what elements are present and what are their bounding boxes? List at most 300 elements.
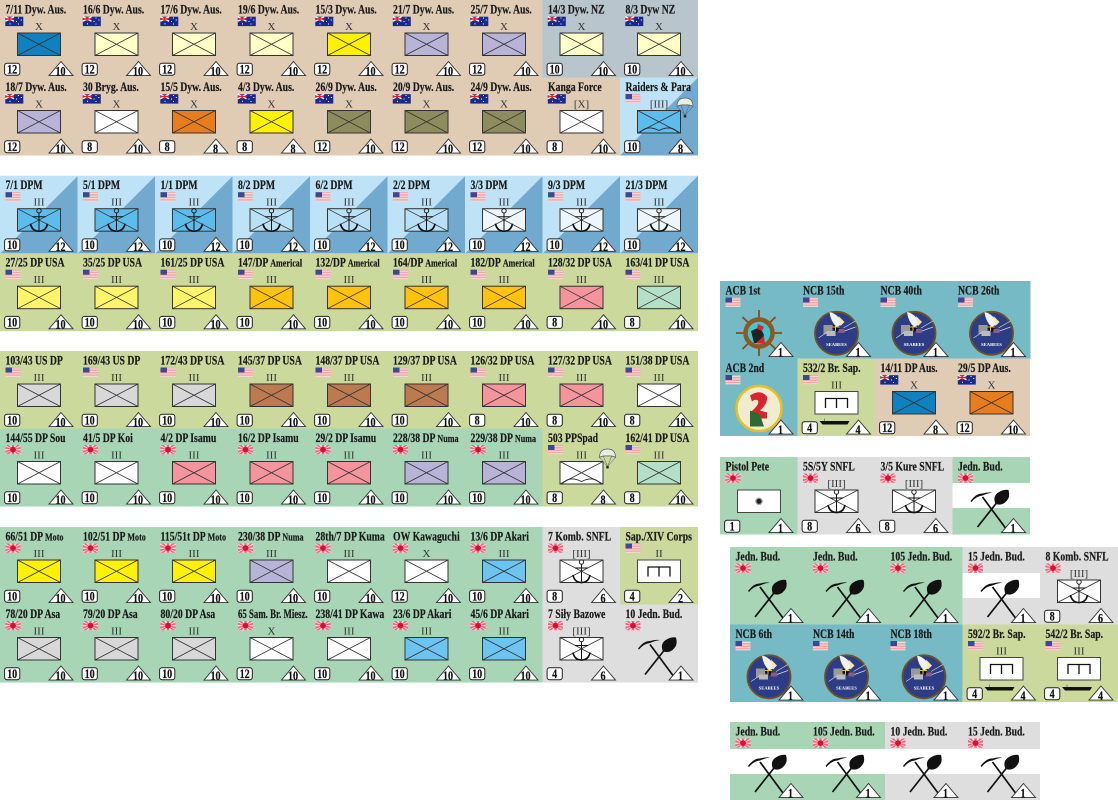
counter: Jedn. Bud.: Jedn. Bud. <box>736 725 780 739</box>
counter: 23/6 DP Akari <box>388 604 466 683</box>
counter: 20/9 Dyw. Aus.: 12 <box>395 141 405 154</box>
counter: NCB 6th: SEABEES <box>759 686 780 690</box>
counter: 29/5 DP Aus.: 29/5 DP Aus. <box>958 362 1011 375</box>
counter: NCB 18th <box>885 624 963 703</box>
counter: 592/2 Br. Sap.: 592/2 Br. Sap. <box>968 628 1026 641</box>
counter: 162/41 DP USA <box>620 428 698 507</box>
counter: 542/2 Br. Sap. <box>1040 624 1118 703</box>
counter: 20/9 Dyw. Aus.: 10 <box>443 143 453 156</box>
counter: 144/55 DP Sou: III <box>34 450 45 462</box>
counter: 66/51 DP Moto: III <box>34 548 45 560</box>
counter: 23/6 DP Akari: III <box>421 626 432 638</box>
counter: 532/2 Br. Sap.: III <box>831 380 842 392</box>
counter: 1/1 DPM <box>155 176 233 254</box>
counter: 14/11 DP Aus.: 12 <box>882 422 892 435</box>
counter: 4/2 DP Isamu <box>155 428 233 507</box>
counter: 144/55 DP Sou <box>0 428 78 507</box>
counter: 15/5 Dyw. Aus.: 8 <box>165 141 170 154</box>
counter: 228/38 DP Numa: III <box>421 450 432 462</box>
counter: 79/20 DP Asa: 79/20 DP Asa <box>83 608 138 621</box>
counter: Kanga Force <box>542 78 620 156</box>
counter: 10 Jedn. Bud. <box>885 722 963 800</box>
counter: 129/37 DP USA: III <box>421 372 432 384</box>
counter: 4/2 DP Isamu: III <box>188 450 200 462</box>
counter: 24/9 Dyw. Aus.: 10 <box>520 143 531 156</box>
counter: 7 Siły Bazowe: [III] <box>572 626 591 638</box>
counter: 229/38 DP Numa <box>465 428 543 507</box>
counter: 29/5 DP Aus.: 12 <box>960 422 970 435</box>
counter: 21/3 DPM <box>620 176 698 254</box>
counter: 9/3 DPM <box>542 176 620 254</box>
counter: 18/7 Dyw. Aus.: 18/7 Dyw. Aus. <box>6 81 67 94</box>
counter: 592/2 Br. Sap. <box>962 624 1040 703</box>
icon: 2nd battalion badge <box>736 386 782 431</box>
counter: 503 PPSpad: 8 <box>552 492 557 505</box>
panel: Japanese artillery and naval infantry counters <box>720 457 1030 536</box>
counter: 105 Jedn. Bud.: 105 Jedn. Bud. <box>891 550 952 564</box>
counter: 28th/7 DP Kuma: 10 <box>317 591 327 604</box>
counter: 172/43 DP USA: 10 <box>162 415 172 428</box>
counter: 21/7 Dyw. Aus. <box>388 0 466 79</box>
counter: 8/2 DPM: 10 <box>240 239 250 252</box>
counter: 6/2 DPM: III <box>344 197 355 209</box>
counter: 161/25 DP USA: 10 <box>210 319 221 332</box>
counter: 9/3 DPM: III <box>576 197 587 209</box>
counter: 6/2 DPM: 10 <box>317 239 327 252</box>
counter: 3/5 Kure SNFL: 8 <box>885 521 890 534</box>
counter: 79/20 DP Asa: III <box>111 626 122 638</box>
counter: 16/2 DP Isamu: 16/2 DP Isamu <box>238 432 299 445</box>
counter: OW Kawaguchi: 12 <box>395 591 405 604</box>
counter: 169/43 US DP: 169/43 US DP <box>83 354 140 368</box>
counter: 16/2 DP Isamu: 10 <box>288 494 298 507</box>
counter: 129/37 DP USA: 10 <box>443 417 453 430</box>
counter: 5/1 DPM <box>78 176 156 254</box>
counter: 129/37 DP USA: 129/37 DP USA <box>393 354 457 368</box>
counter: 17/6 Dyw. Aus.: X <box>190 21 198 33</box>
counter: 7/1 DPM: 12 <box>55 241 66 254</box>
counter: 6/2 DPM: 6/2 DPM <box>316 179 353 193</box>
counter: Jedn. Bud. <box>952 457 1030 536</box>
counter: 66/51 DP Moto: 66/51 DP Moto <box>6 530 64 544</box>
counter: Pistol Pete: 1 <box>730 521 735 534</box>
counter: 45/6 DP Akari: 10 <box>472 668 482 681</box>
counter: 16/6 Dyw. Aus. <box>78 0 156 79</box>
counter: 28th/7 DP Kuma: 10 <box>365 593 376 606</box>
counter: 29/2 DP Isamu <box>310 428 388 507</box>
counter: 148/37 DP USA <box>310 351 388 430</box>
counter: 164/DP Americal: III <box>421 274 432 286</box>
counter: Kanga Force: 10 <box>598 143 608 156</box>
counter: NCB 14th: NCB 14th <box>813 628 855 641</box>
counter: 128/32 DP USA: 10 <box>598 319 608 332</box>
counter: 7/1 DPM: 7/1 DPM <box>6 179 43 193</box>
counter: 41/5 DP Koi: 41/5 DP Koi <box>83 432 133 445</box>
counter: 7 Komb. SNFL: 7 Komb. SNFL <box>548 530 611 544</box>
counter: 164/DP Americal: 164/DP Americal <box>393 257 457 270</box>
counter: 8/2 DPM: 8/2 DPM <box>238 179 275 193</box>
counter: 18/7 Dyw. Aus.: 12 <box>7 141 17 154</box>
counter: 13/6 DP Akari: III <box>498 548 510 560</box>
counter: 103/43 US DP: 103/43 US DP <box>6 354 63 368</box>
counter: 16/6 Dyw. Aus.: 10 <box>133 66 143 79</box>
counter: 161/25 DP USA: 161/25 DP USA <box>161 257 225 270</box>
counter: NCB 14th <box>808 624 886 703</box>
counter: 3/3 DPM: 12 <box>520 241 531 254</box>
counter: 24/9 Dyw. Aus.: 12 <box>472 141 482 154</box>
counter: 145/37 DP USA: 10 <box>240 415 250 428</box>
counter: 532/2 Br. Sap. <box>798 358 876 437</box>
counter: 19/6 Dyw. Aus.: 19/6 Dyw. Aus. <box>238 3 299 17</box>
counter: 8/3 Dyw NZ: 8/3 Dyw NZ <box>626 3 676 17</box>
counter: 15 Jedn. Bud. <box>962 722 1040 800</box>
counter: 17/6 Dyw. Aus.: 17/6 Dyw. Aus. <box>161 3 222 17</box>
counter: 172/43 DP USA: 10 <box>210 417 221 430</box>
counter: 151/38 DP USA: 8 <box>630 415 635 428</box>
counter: 542/2 Br. Sap.: 4 <box>1050 688 1055 701</box>
counter: 41/5 DP Koi: 10 <box>133 494 143 507</box>
counter: 29/2 DP Isamu: III <box>344 450 355 462</box>
icon: ship wheel badge <box>736 310 782 356</box>
counter: 503 PPSpad: 8 <box>600 494 606 507</box>
counter: 6/2 DPM <box>310 176 388 254</box>
counter: 17/6 Dyw. Aus.: 10 <box>210 66 221 79</box>
counter: 105 Jedn. Bud. <box>885 547 963 626</box>
counter: Jedn. Bud. <box>730 722 808 800</box>
counter: 182/DP Americal: III <box>498 274 510 286</box>
counter: Raiders & Para: 8 <box>678 143 683 156</box>
counter: 20/9 Dyw. Aus.: X <box>423 98 431 110</box>
counter: 29/2 DP Isamu: 10 <box>317 492 327 505</box>
counter: 26/9 Dyw. Aus.: 26/9 Dyw. Aus. <box>316 81 377 94</box>
counter: 102/51 DP Moto: 10 <box>85 591 95 604</box>
counter: 15/3 Dyw. Aus.: 15/3 Dyw. Aus. <box>316 3 377 17</box>
counter: 24/9 Dyw. Aus.: X <box>500 98 508 110</box>
counter: 17/6 Dyw. Aus. <box>155 0 233 79</box>
counter: 103/43 US DP <box>0 351 78 430</box>
counter: 7/11 Dyw. Aus.: 10 <box>55 66 66 79</box>
counter: 15/3 Dyw. Aus.: 10 <box>365 66 376 79</box>
counter: 238/41 DP Kawa: 10 <box>365 670 376 683</box>
counter: 23/6 DP Akari: 10 <box>443 670 453 683</box>
counter: 103/43 US DP: III <box>34 372 45 384</box>
counter: 148/37 DP USA: 10 <box>317 415 327 428</box>
counter: 127/32 DP USA: 127/32 DP USA <box>548 354 612 368</box>
counter: 164/DP Americal: 10 <box>443 319 453 332</box>
counter: 21/3 DPM: 21/3 DPM <box>626 179 668 193</box>
counter: 16/2 DP Isamu: 10 <box>240 492 250 505</box>
counter: 163/41 DP USA: III <box>654 274 665 286</box>
counter: 65 Sam. Br. Miesz. <box>232 604 310 683</box>
counter: 25/7 Dyw. Aus.: 12 <box>472 64 482 77</box>
counter: 13/6 DP Akari: 10 <box>472 591 482 604</box>
counter: 129/37 DP USA <box>388 351 466 430</box>
counter: NCB 40th: NCB 40th <box>881 284 922 298</box>
counter: 147/DP Americal: III <box>266 274 277 286</box>
counter: 10 Jedn. Bud. <box>620 604 698 683</box>
counter: NCB 15th <box>798 281 876 360</box>
counter: 102/51 DP Moto: 102/51 DP Moto <box>83 530 146 544</box>
counter: 27/25 DP USA: 27/25 DP USA <box>6 257 65 270</box>
counter: 3/5 Kure SNFL <box>875 457 953 536</box>
counter: 542/2 Br. Sap.: III <box>1074 646 1085 658</box>
counter: 16/2 DP Isamu: III <box>266 450 277 462</box>
counter: NCB 14th: SEABEES <box>836 686 857 690</box>
counter: 15 Jedn. Bud. <box>962 547 1040 626</box>
counter: 503 PPSpad: 503 PPSpad <box>548 432 599 445</box>
counter: 78/20 DP Asa: 10 <box>55 670 66 683</box>
counter: 80/20 DP Asa: 10 <box>162 668 172 681</box>
counter: 148/37 DP USA: 10 <box>365 417 376 430</box>
counter: 2/2 DPM: 12 <box>443 241 453 254</box>
counter: 30 Bryg. Aus.: 30 Bryg. Aus. <box>83 81 139 94</box>
counter: NCB 26th <box>952 281 1030 360</box>
counter: Jedn. Bud. <box>730 547 808 626</box>
counter: 132/DP Americal: 10 <box>317 317 327 330</box>
counter: 28th/7 DP Kuma: 28th/7 DP Kuma <box>316 530 385 544</box>
counter: 15/5 Dyw. Aus.: X <box>190 98 198 110</box>
counter: NCB 6th: 1 <box>788 690 793 703</box>
counter: 4/3 Dyw. Aus.: 8 <box>290 143 296 156</box>
counter: 127/32 DP USA <box>542 351 620 430</box>
counter: 8 Komb. SNFL: 6 <box>1098 613 1103 626</box>
counter: NCB 40th: SEABEES <box>904 342 925 347</box>
counter: 79/20 DP Asa: 10 <box>133 670 143 683</box>
counter: Jedn. Bud. <box>808 547 886 626</box>
counter: OW Kawaguchi: X <box>423 548 431 560</box>
counter: 238/41 DP Kawa: 238/41 DP Kawa <box>316 608 384 621</box>
counter: 4/2 DP Isamu: 10 <box>210 494 221 507</box>
counter: 126/32 DP USA: 10 <box>520 417 531 430</box>
counter: 14/3 Dyw. NZ: X <box>578 21 586 33</box>
counter: Pistol Pete <box>720 457 798 536</box>
counter: 14/3 Dyw. NZ: 14/3 Dyw. NZ <box>548 3 605 17</box>
counter: 25/7 Dyw. Aus.: 25/7 Dyw. Aus. <box>471 3 532 17</box>
counter: 169/43 US DP: 10 <box>133 417 143 430</box>
counter: Jedn. Bud.: Jedn. Bud. <box>736 550 780 564</box>
counter: 147/DP Americal <box>232 253 310 332</box>
counter: Jedn. Bud.: 1 <box>865 613 871 626</box>
counter: 8/3 Dyw NZ: 10 <box>675 66 686 79</box>
counter: 26/9 Dyw. Aus.: X <box>345 98 353 110</box>
counter: 3/3 DPM: III <box>498 197 510 209</box>
counter: 41/5 DP Koi: III <box>111 450 122 462</box>
counter: 15/3 Dyw. Aus. <box>310 0 388 79</box>
counter: 238/41 DP Kawa: III <box>344 626 355 638</box>
counter: 21/3 DPM: 10 <box>627 239 637 252</box>
counter: 105 Jedn. Bud.: 1 <box>943 613 948 626</box>
counter: 7/11 Dyw. Aus.: 12 <box>7 64 17 77</box>
counter: 182/DP Americal: 182/DP Americal <box>471 257 535 270</box>
counter: ACB 1st <box>720 281 798 360</box>
counter: 30 Bryg. Aus. <box>78 78 156 156</box>
counter: 8 Komb. SNFL <box>1040 547 1118 626</box>
counter: 115/51t DP Moto: III <box>188 548 200 560</box>
counter: 15 Jedn. Bud.: 15 Jedn. Bud. <box>968 725 1025 739</box>
counter: Pistol Pete: Pistol Pete <box>726 460 769 474</box>
counter: 14/11 DP Aus. <box>875 358 953 437</box>
counter: 5/1 DPM: 12 <box>133 241 143 254</box>
counter: 163/41 DP USA: 163/41 DP USA <box>626 257 690 270</box>
counter: 147/DP Americal: 10 <box>240 317 250 330</box>
panel: US construction battalion counters <box>720 281 1030 437</box>
counter: 169/43 US DP <box>78 351 156 430</box>
counter: 15/5 Dyw. Aus.: 8 <box>213 143 218 156</box>
counter: 151/38 DP USA: III <box>654 372 665 384</box>
counter: 4/2 DP Isamu: 4/2 DP Isamu <box>161 432 217 445</box>
counter: ACB 2nd: ACB 2nd <box>726 362 765 375</box>
counter: 24/9 Dyw. Aus. <box>465 78 543 156</box>
counter: 14/11 DP Aus.: X <box>910 380 918 392</box>
counter: 3/3 DPM: 3/3 DPM <box>471 179 508 193</box>
counter: 132/DP Americal: III <box>344 274 355 286</box>
counter: 45/6 DP Akari <box>465 604 543 683</box>
counter: NCB 6th: NCB 6th <box>736 628 773 641</box>
counter: 163/41 DP USA: 8 <box>630 317 635 330</box>
counter: 14/3 Dyw. NZ: 10 <box>598 66 608 79</box>
counter: 21/7 Dyw. Aus.: 21/7 Dyw. Aus. <box>393 3 454 17</box>
counter: NCB 14th: 1 <box>865 690 871 703</box>
counter: 115/51t DP Moto: 10 <box>162 591 172 604</box>
counter: NCB 6th <box>730 624 808 703</box>
counter: 238/41 DP Kawa: 10 <box>317 668 327 681</box>
counter: Jedn. Bud.: Jedn. Bud. <box>958 460 1003 474</box>
counter: OW Kawaguchi <box>388 527 466 606</box>
counter: 7/1 DPM: 10 <box>7 239 17 252</box>
counter: 15/5 Dyw. Aus.: 15/5 Dyw. Aus. <box>161 81 222 94</box>
counter: 4/2 DP Isamu: 10 <box>162 492 172 505</box>
counter: 132/DP Americal: 132/DP Americal <box>316 257 380 270</box>
counter: 15 Jedn. Bud.: 15 Jedn. Bud. <box>968 550 1025 564</box>
counter: 26/9 Dyw. Aus. <box>310 78 388 156</box>
counter: 103/43 US DP: 10 <box>55 417 66 430</box>
counter: 532/2 Br. Sap.: 4 <box>855 424 861 437</box>
counter: 145/37 DP USA: III <box>266 372 277 384</box>
counter: 35/25 DP USA: 10 <box>85 317 95 330</box>
counter: 35/25 DP USA: 10 <box>133 319 143 332</box>
counter: 7/11 Dyw. Aus.: 7/11 Dyw. Aus. <box>6 3 66 17</box>
counter: 30 Bryg. Aus.: 10 <box>133 143 143 156</box>
counter: 13/6 DP Akari: 10 <box>520 593 531 606</box>
counter: 65 Sam. Br. Miesz.: X <box>268 626 276 638</box>
counter: 163/41 DP USA <box>620 253 698 332</box>
counter: Jedn. Bud.: 1 <box>788 613 793 626</box>
counter: 8/3 Dyw NZ <box>620 0 698 79</box>
counter: 41/5 DP Koi <box>78 428 156 507</box>
counter: NCB 15th: SEABEES <box>826 342 847 347</box>
counter: 4/3 Dyw. Aus.: 4/3 Dyw. Aus. <box>238 81 294 94</box>
counter: 15/3 Dyw. Aus.: X <box>345 21 353 33</box>
counter: 18/7 Dyw. Aus. <box>0 78 78 156</box>
counter: 8/2 DPM: III <box>266 197 277 209</box>
counter: 4/3 Dyw. Aus.: X <box>268 98 276 110</box>
counter: 8/2 DPM: 12 <box>288 241 298 254</box>
counter: 9/3 DPM: 10 <box>550 239 560 252</box>
counter: 16/2 DP Isamu <box>232 428 310 507</box>
counter: Raiders & Para: [III] <box>650 98 668 110</box>
counter: 27/25 DP USA <box>0 253 78 332</box>
counter: 126/32 DP USA: 8 <box>475 415 480 428</box>
counter: 3/3 DPM <box>465 176 543 254</box>
counter: Raiders & Para: Raiders & Para <box>626 81 691 94</box>
counter: 7/11 Dyw. Aus. <box>0 0 78 79</box>
counter: 21/7 Dyw. Aus.: 12 <box>395 64 405 77</box>
counter: 23/6 DP Akari: 10 <box>395 668 405 681</box>
counter: 145/37 DP USA: 145/37 DP USA <box>238 354 302 368</box>
counter: 29/5 DP Aus. <box>952 358 1030 437</box>
counter: Sap./XIV Corps: 4 <box>630 591 635 604</box>
counter: 182/DP Americal: 10 <box>520 319 531 332</box>
counter: 16/6 Dyw. Aus.: X <box>113 21 121 33</box>
counter: 102/51 DP Moto <box>78 527 156 606</box>
counter: 2/2 DPM: 10 <box>395 239 405 252</box>
counter: 28th/7 DP Kuma <box>310 527 388 606</box>
counter: 45/6 DP Akari: 45/6 DP Akari <box>471 608 530 621</box>
counter: 23/6 DP Akari: 23/6 DP Akari <box>393 608 452 621</box>
counter: 7 Komb. SNFL: 8 <box>552 591 557 604</box>
counter: 65 Sam. Br. Miesz.: 12 <box>240 668 250 681</box>
counter: 2/2 DPM <box>388 176 466 254</box>
counter: 129/37 DP USA: 10 <box>395 415 405 428</box>
counter: 20/9 Dyw. Aus. <box>388 78 466 156</box>
counter: 230/38 DP Numa <box>232 527 310 606</box>
counter: 45/6 DP Akari: 10 <box>520 670 531 683</box>
counter: 7/1 DPM <box>0 176 78 254</box>
counter: Jedn. Bud.: Jedn. Bud. <box>813 550 858 564</box>
counter: 41/5 DP Koi: 10 <box>85 492 95 505</box>
counter: 1/1 DPM: 10 <box>162 239 172 252</box>
counter: 148/37 DP USA: III <box>344 372 355 384</box>
counter: Raiders & Para <box>620 78 698 156</box>
counter: 5S/5Y SNFL: [III] <box>827 478 846 490</box>
counter: Jedn. Bud.: 1 <box>1010 523 1016 536</box>
counter: NCB 18th: SEABEES <box>914 686 935 690</box>
counter: 115/51t DP Moto <box>155 527 233 606</box>
counter: 3/5 Kure SNFL: 3/5 Kure SNFL <box>881 460 944 474</box>
counter: 230/38 DP Numa: 10 <box>240 591 250 604</box>
counter: 4/3 Dyw. Aus.: 8 <box>242 141 247 154</box>
counter: 128/32 DP USA: 128/32 DP USA <box>548 257 612 270</box>
counter: 5S/5Y SNFL: 6 <box>855 523 861 536</box>
counter: 172/43 DP USA: III <box>188 372 200 384</box>
counter: 14/3 Dyw. NZ: 10 <box>550 64 560 77</box>
counter: 161/25 DP USA: III <box>188 274 200 286</box>
counter: 532/2 Br. Sap.: 532/2 Br. Sap. <box>803 362 861 375</box>
counter: 5S/5Y SNFL: 8 <box>807 521 812 534</box>
counter: 229/38 DP Numa: 10 <box>520 494 531 507</box>
counter: 13/6 DP Akari <box>465 527 543 606</box>
counter: 103/43 US DP: 10 <box>7 415 17 428</box>
counter: 79/20 DP Asa <box>78 604 156 683</box>
counter: NCB 18th: NCB 18th <box>891 628 932 641</box>
counter: 66/51 DP Moto: 10 <box>55 593 66 606</box>
counter: 19/6 Dyw. Aus.: X <box>268 21 276 33</box>
counter: Pistol Pete: 1 <box>778 523 783 536</box>
counter: 228/38 DP Numa: 228/38 DP Numa <box>393 432 459 445</box>
counter: 164/DP Americal <box>388 253 466 332</box>
panel: Japanese regiment counters <box>0 527 698 683</box>
counter: 17/6 Dyw. Aus.: 12 <box>162 64 172 77</box>
counter: 2/2 DPM: 2/2 DPM <box>393 179 430 193</box>
counter: 18/7 Dyw. Aus.: X <box>35 98 43 110</box>
counter: 115/51t DP Moto: 10 <box>210 593 221 606</box>
counter: 19/6 Dyw. Aus. <box>232 0 310 79</box>
counter: NCB 26th: 1 <box>1010 347 1016 360</box>
counter: 169/43 US DP: 10 <box>85 415 95 428</box>
counter: 127/32 DP USA: 8 <box>552 415 557 428</box>
counter: Sap./XIV Corps: Sap./XIV Corps <box>626 530 692 544</box>
counter: 126/32 DP USA <box>465 351 543 430</box>
